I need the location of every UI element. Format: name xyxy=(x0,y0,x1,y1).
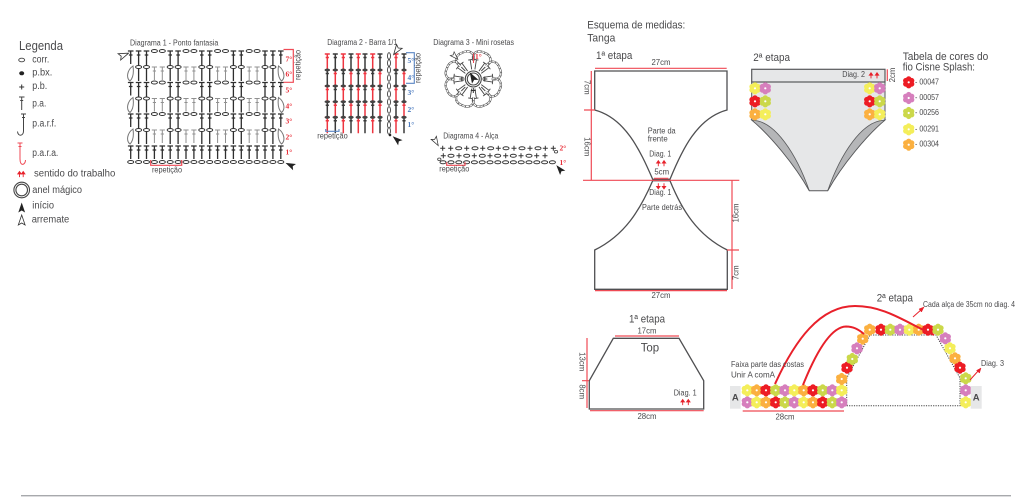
icon: finish arrow xyxy=(431,136,441,147)
legend item: início: início xyxy=(32,200,54,211)
measure lines xyxy=(582,336,704,411)
heading: esquema de medidas: Tanga xyxy=(587,33,616,45)
back band note: Faixa parte das costas xyxy=(731,360,804,369)
waistband xyxy=(752,69,885,82)
legend xyxy=(14,38,116,226)
red curve: outer strap xyxy=(775,306,934,384)
bottom repeat bracket: repetição xyxy=(317,131,348,140)
piece labels: frente xyxy=(648,135,668,144)
side repeat bracket: repetição xyxy=(414,52,422,83)
piece labels: Diag. 1 xyxy=(649,188,671,197)
color 00047: - 00047 xyxy=(915,78,939,86)
rosette petals xyxy=(443,49,503,109)
piece labels: Parte detrás xyxy=(642,203,682,212)
icon: start arrow xyxy=(390,134,403,145)
diagram 4: alça xyxy=(431,131,566,175)
row numbers: 2° xyxy=(286,132,292,141)
legend item: anel mágico xyxy=(14,182,82,198)
legend item: p.b. xyxy=(19,81,47,92)
panel: top 2ª etapa xyxy=(730,293,1016,422)
row numbers: 3° xyxy=(408,88,414,97)
back band note xyxy=(731,360,804,380)
icon: finish arrow xyxy=(450,52,460,61)
row numbers: 5° xyxy=(408,56,414,65)
body xyxy=(752,82,885,191)
icon: start arrow xyxy=(284,160,296,170)
band measure xyxy=(743,411,844,422)
color table title xyxy=(903,51,988,74)
row numbers: 4° xyxy=(408,73,414,82)
diag. 3 label: Diag. 3 xyxy=(981,359,1004,368)
legend item: p.a.: p.a. xyxy=(32,99,46,110)
legend item: arremate: arremate xyxy=(32,215,70,226)
legend item: sentido do trabalho: sentido do trabalho xyxy=(34,169,116,180)
foundation chain xyxy=(128,160,284,164)
direction arrows xyxy=(657,161,666,189)
legend item: corr.: corr. xyxy=(32,54,49,66)
icon: start arrow xyxy=(554,163,565,175)
red curve: inner strap xyxy=(803,326,864,385)
measure labels: 27cm xyxy=(651,58,671,67)
diagram 4 title: Diagrama 4 - Alça xyxy=(443,131,499,140)
legend item: p.a.r.f. xyxy=(18,114,56,135)
row numbers: 1° xyxy=(286,147,292,156)
diagram 2: barra 1/1 xyxy=(317,38,422,145)
row numbers xyxy=(560,144,566,167)
step heading: 2ª etapa xyxy=(753,52,791,64)
stitch row 1 xyxy=(128,146,284,159)
legend title: Legenda xyxy=(19,38,64,53)
legend item: p.bx.: p.bx. xyxy=(32,68,52,79)
legend item: p.bx. xyxy=(19,68,52,79)
measure labels: 16cm xyxy=(732,203,740,223)
piece labels: Parte da xyxy=(648,126,676,135)
second flower row xyxy=(742,384,847,396)
color 00304: - 00304 xyxy=(915,140,940,148)
legend item: p.a. xyxy=(19,97,46,110)
arch flowers xyxy=(836,324,971,408)
icon: finish arrow xyxy=(118,50,130,60)
row numbers xyxy=(408,56,414,129)
join marker left: A xyxy=(732,392,739,404)
row numbers: 2° xyxy=(408,105,414,114)
row numbers: 2° xyxy=(560,144,566,153)
color 00291: - 00291 xyxy=(915,124,939,134)
color table xyxy=(903,51,988,151)
step heading: 2ª etapa xyxy=(877,293,914,305)
band measure: 28cm xyxy=(775,412,795,422)
measure labels: 5cm xyxy=(654,168,669,177)
legend item: p.b.: p.b. xyxy=(32,81,47,92)
measure labels: 16cm xyxy=(582,137,592,156)
measure labels: 27cm xyxy=(651,291,671,300)
row numbers: 4° xyxy=(286,101,292,110)
magic ring xyxy=(465,71,481,87)
measure labels: 13cm xyxy=(578,352,586,371)
top label: Top xyxy=(641,341,660,355)
join marker left xyxy=(730,386,741,409)
waistband label: Diag. 2 xyxy=(842,70,865,79)
piece labels: Diag. 1 xyxy=(649,150,671,159)
legend item: p.a.r.a.: p.a.r.a. xyxy=(32,148,58,159)
waistband measure: 2cm xyxy=(888,68,897,82)
back piece outline xyxy=(595,181,727,289)
bottom repeat bracket xyxy=(151,160,183,175)
bottom flower row xyxy=(742,396,847,408)
side repeat bracket xyxy=(284,49,302,82)
color table title: Tabela de cores do xyxy=(903,51,988,63)
row numbers: 1° xyxy=(560,158,566,167)
strap note: Cada alça de 35cm no diag. 4 xyxy=(923,300,1016,309)
measure labels xyxy=(578,326,657,421)
join marker right: A xyxy=(973,392,980,404)
piece labels xyxy=(642,126,682,212)
row numbers: 5° xyxy=(286,86,292,95)
row numbers: 3° xyxy=(286,116,292,125)
measure labels xyxy=(582,58,740,300)
right flowers xyxy=(864,82,885,120)
diagram note: Diag. 1 xyxy=(674,389,697,398)
measure labels: 17cm xyxy=(637,326,657,335)
legend item: início xyxy=(18,200,54,212)
diagram 3: mini rosetas xyxy=(433,38,514,109)
front piece outline xyxy=(595,71,727,179)
arrow: diag. 3 xyxy=(970,368,981,380)
arrow: strap note xyxy=(913,307,924,317)
bottom repeat bracket: repetição xyxy=(152,166,183,175)
color 00256: - 00256 xyxy=(915,108,939,117)
diagram 2 title: Diagrama 2 - Barra 1/1 xyxy=(327,38,398,47)
legend item: anel mágico: anel mágico xyxy=(32,185,82,196)
stitch row 1 xyxy=(438,153,548,161)
legend item: p.a.r.f.: p.a.r.f. xyxy=(32,119,56,130)
measure labels: 7cm xyxy=(732,265,740,280)
measure labels: 28cm xyxy=(637,412,657,421)
footer rule xyxy=(21,495,1011,496)
stitch rows xyxy=(325,54,407,133)
diagram 3 title: Diagrama 3 - Mini rosetas xyxy=(433,38,514,47)
diagram 1 title: Diagrama 1 - Ponto fantasia xyxy=(130,39,219,48)
diagram 1: ponto fantasia xyxy=(118,39,302,175)
foundation chain xyxy=(440,161,555,164)
stitch row 2 xyxy=(440,146,558,153)
measure labels: 7cm xyxy=(582,80,592,95)
icon: start arrow xyxy=(467,70,478,84)
measure lines xyxy=(583,68,739,291)
row numbers: 7° xyxy=(286,55,292,64)
heading: esquema de medidas: Esquema de medidas: xyxy=(587,20,685,32)
color table title: fio Cisne Splash: xyxy=(903,62,975,74)
color 00057: - 00057 xyxy=(915,93,939,102)
panel: tanga 2ª etapa xyxy=(749,52,897,191)
waistband label xyxy=(842,70,879,79)
heading: esquema de medidas xyxy=(587,20,685,45)
icon: finish arrow xyxy=(391,44,402,57)
step heading: 1ª etapa xyxy=(596,50,633,62)
dotted top outline xyxy=(847,335,960,406)
row numbers xyxy=(286,55,292,156)
left wedge xyxy=(752,120,809,191)
panel: top 1ª etapa xyxy=(578,313,704,421)
side repeat bracket: repetição xyxy=(294,49,302,80)
top outline xyxy=(589,338,704,409)
round number: 1° xyxy=(475,52,482,61)
repeat bracket: repetição xyxy=(439,165,470,174)
vertical chain xyxy=(388,53,391,136)
back band note: Unir A comA xyxy=(731,370,776,380)
right wedge xyxy=(828,120,885,191)
measure labels: 8cm xyxy=(578,384,586,399)
join marker right xyxy=(971,386,982,409)
stitch rows 7 to 2 xyxy=(128,50,284,144)
panel: tanga 1ª etapa xyxy=(582,50,740,300)
left flowers xyxy=(749,82,771,120)
row numbers: 6° xyxy=(286,70,292,79)
step heading: 1ª etapa xyxy=(629,313,666,325)
legend item: p.a.r.a. xyxy=(18,143,58,164)
row numbers: 1° xyxy=(408,120,414,129)
legend item: corr. xyxy=(19,54,49,66)
